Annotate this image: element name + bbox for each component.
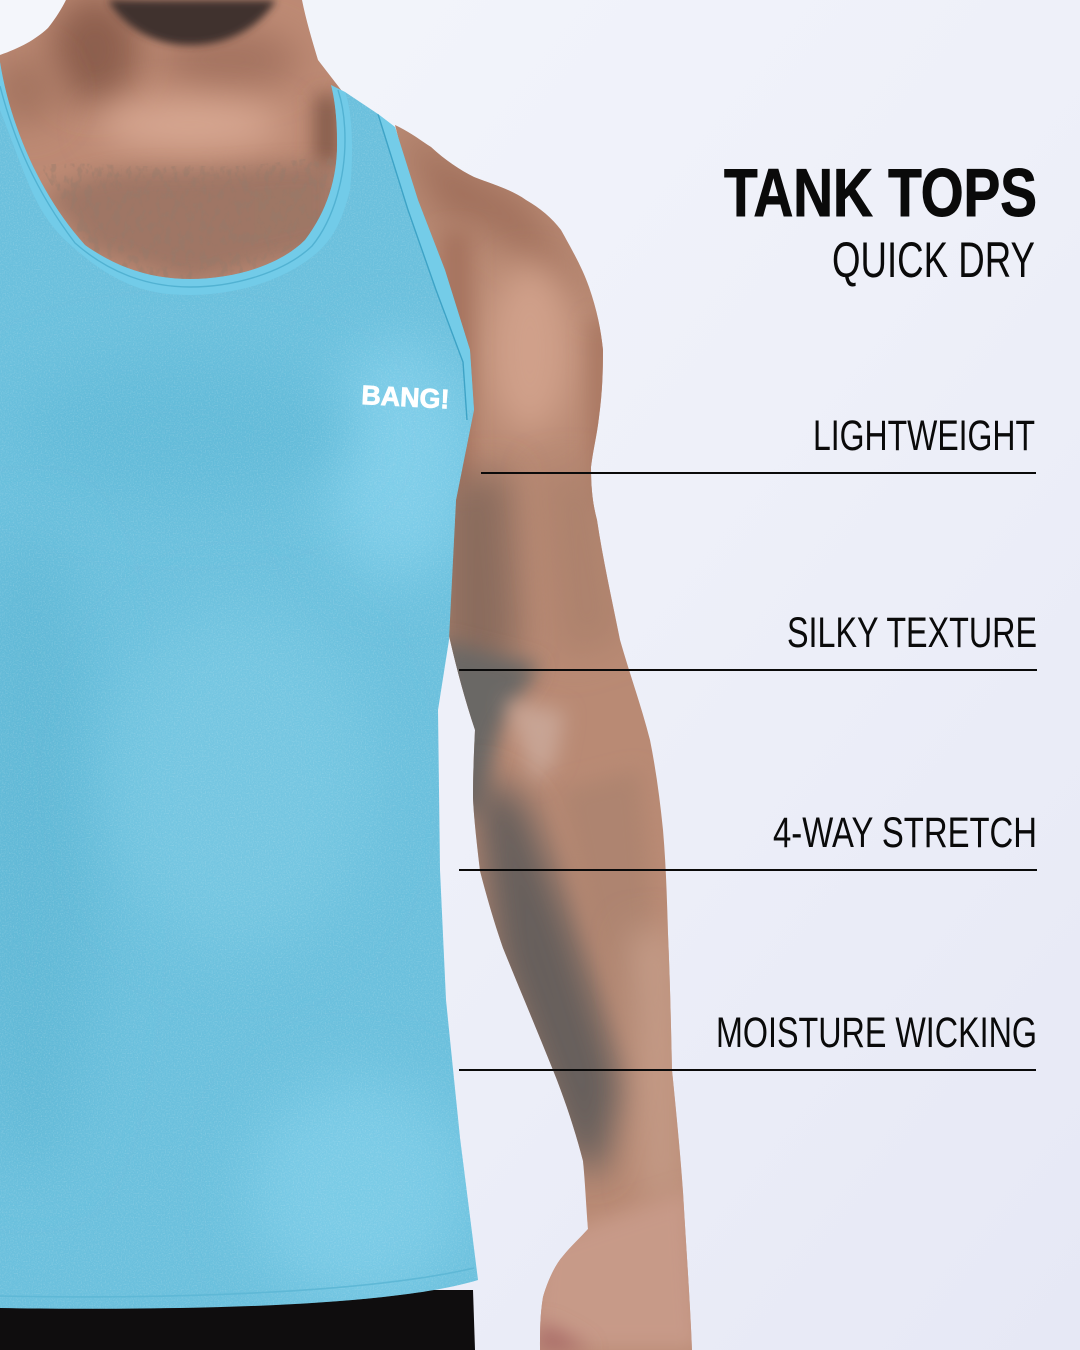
chest hair shading xyxy=(45,164,336,282)
chest hair texture xyxy=(43,159,305,278)
arm and hand xyxy=(380,110,700,1350)
logo: BANG!: BANG! xyxy=(361,380,450,415)
neckline trim xyxy=(0,62,352,295)
neck and chest skin xyxy=(0,0,342,279)
photo: model wearing tank top xyxy=(0,0,700,1350)
shorts xyxy=(0,1290,475,1350)
beard xyxy=(108,0,276,45)
armhole trim xyxy=(378,114,474,410)
tank top xyxy=(0,50,490,1320)
shirt hem xyxy=(0,1268,474,1297)
